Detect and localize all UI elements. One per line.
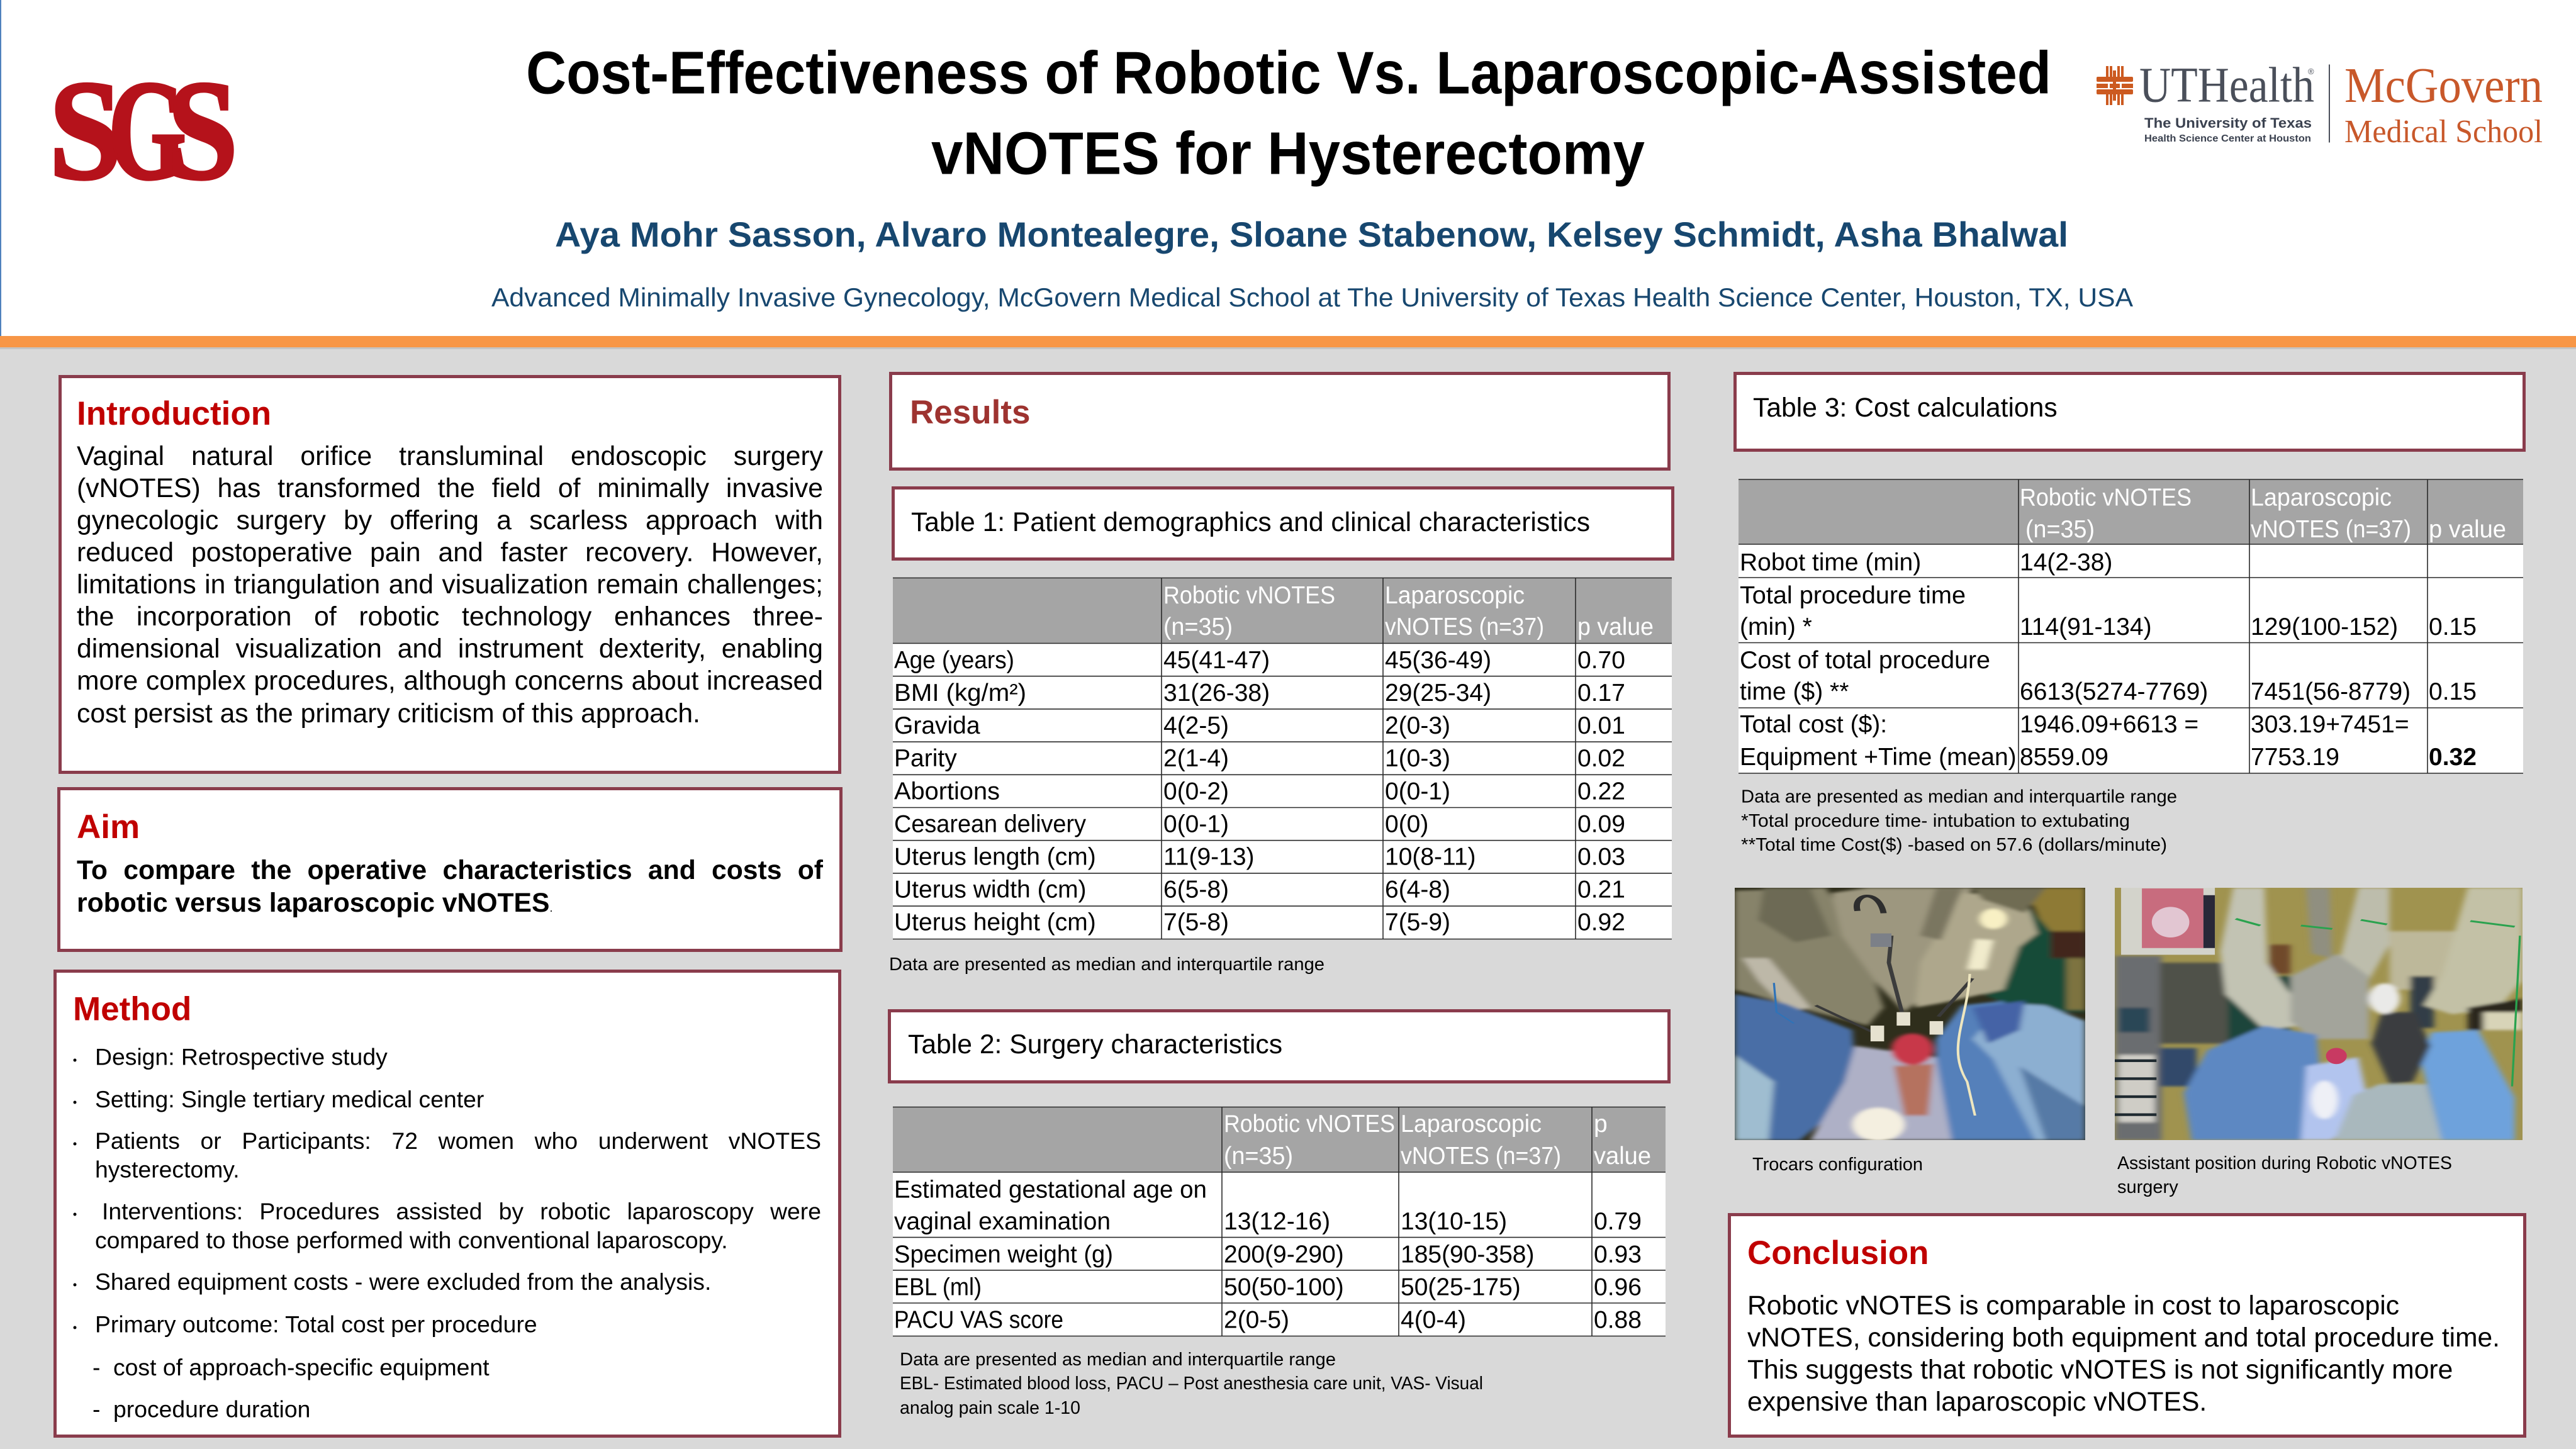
table 1: patient demographics: vNOTES (n=37) xyxy=(1385,613,1544,641)
list: method items: Design: Retrospective study xyxy=(95,1043,388,1070)
table 3: cost calculations: vNOTES (n=37) xyxy=(2251,516,2411,543)
logo: UTHealth McGovern Medical School: Health Science Center at Houston xyxy=(2144,133,2311,144)
table 3: cost calculations: 7753.19 xyxy=(2251,744,2339,771)
table 1: patient demographics: 0.01 xyxy=(1577,712,1625,739)
table 1: patient demographics: 0(0) xyxy=(1385,810,1428,838)
table 1: patient demographics: 7(5-8) xyxy=(1163,909,1229,936)
table 3: cost calculations: Total procedure time xyxy=(1740,582,1966,609)
table 2: surgery characteristics: Robotic vNOTES xyxy=(1224,1111,1395,1138)
list: method items: hysterectomy. xyxy=(95,1156,240,1183)
panel: table 3 title xyxy=(1735,374,2524,450)
table 3: cost calculations: Cost of total procedure xyxy=(1740,647,1990,674)
list: method items xyxy=(73,1043,821,1422)
panel: conclusion xyxy=(1729,1214,2524,1436)
table 2: surgery characteristics: (n=35) xyxy=(1224,1143,1293,1170)
table 3: cost calculations xyxy=(1739,479,2523,773)
table 1: patient demographics: 0(0-1) xyxy=(1385,778,1450,805)
table 1: patient demographics: 0.22 xyxy=(1577,778,1625,805)
text block: introduction body: reduced postoperative pain and faster recovery. However, xyxy=(77,537,823,568)
title: Cost-Effectiveness of Robotic Vs. Laparoscopic-Assisted xyxy=(526,39,2051,107)
text block: conclusion body: Robotic vNOTES is comparable in cost to laparoscopic xyxy=(1747,1290,2399,1321)
table 3: cost calculations: Laparoscopic xyxy=(2251,484,2392,512)
table 2: surgery characteristics: 185(90-358) xyxy=(1401,1241,1534,1268)
table 1: patient demographics: Uterus length (cm) xyxy=(894,843,1096,871)
text block: introduction body: more complex procedures, although concerns about increased xyxy=(77,666,823,696)
photo: assistant position during robotic surgery xyxy=(2115,888,2523,1140)
table 2: surgery characteristics: 50(25-175) xyxy=(1401,1274,1521,1301)
text block: aim body xyxy=(77,854,823,918)
logo: UTHealth McGovern Medical School: Medical School xyxy=(2344,114,2543,150)
table 2 notes xyxy=(900,1350,1483,1418)
panel: method xyxy=(55,971,839,1436)
table 1: patient demographics: 4(2-5) xyxy=(1163,712,1229,739)
table 2 notes: Data are presented as median and interquartile range xyxy=(900,1350,1336,1370)
table 3: cost calculations: 129(100-152) xyxy=(2251,613,2398,641)
table 1: patient demographics: 0(0-1) xyxy=(1163,810,1229,838)
table 3 notes: Data are presented as median and interquartile range xyxy=(1741,787,2177,807)
table 1: patient demographics: 0(0-2) xyxy=(1163,778,1229,805)
logo: SGS: G xyxy=(108,52,186,209)
table 1: patient demographics: 31(26-38) xyxy=(1163,680,1270,707)
table 2: surgery characteristics: value xyxy=(1594,1143,1651,1170)
table 1: patient demographics: 0.03 xyxy=(1577,843,1625,871)
table 2: surgery characteristics: Specimen weight (g) xyxy=(894,1241,1113,1268)
text block: introduction body: the incorporation of robotic technology enhances three- xyxy=(77,601,823,632)
table 1: patient demographics: 0.92 xyxy=(1577,909,1625,936)
table 3: cost calculations: 6613(5274-7769) xyxy=(2020,678,2208,705)
panel: table 2 title xyxy=(890,1010,1669,1082)
text block: introduction body: Vaginal natural orifice transluminal endoscopic surgery xyxy=(77,441,823,471)
panel: introduction xyxy=(60,376,839,773)
table 1: patient demographics: 0.09 xyxy=(1577,810,1625,838)
caption: trocars: Trocars configuration xyxy=(1752,1155,1923,1175)
table 2 notes: EBL- Estimated blood loss, PACU – Post anesthesia care unit, VAS- Visual xyxy=(900,1373,1483,1394)
text block: aim body: To compare the operative characteristics and costs of xyxy=(77,855,823,885)
panel: results heading: Results xyxy=(910,394,1030,431)
table 1: patient demographics: BMI (kg/m²) xyxy=(894,680,1026,707)
table 1: patient demographics: Laparoscopic xyxy=(1385,582,1525,609)
table 1: patient demographics: 45(36-49) xyxy=(1385,647,1491,674)
list: method items: procedure duration xyxy=(113,1396,310,1422)
heading: conclusion: Conclusion xyxy=(1747,1234,1929,1272)
table 1: patient demographics: Cesarean delivery xyxy=(894,810,1086,838)
table 3: cost calculations: time ($) ** xyxy=(1740,678,1849,705)
text block: conclusion body: expensive than laparoscopic vNOTES. xyxy=(1747,1387,2207,1417)
panel: aim xyxy=(59,789,841,950)
logo: UTHealth McGovern Medical School: McGovern xyxy=(2344,59,2543,113)
text block: conclusion body: vNOTES, considering both equipment and total procedure time. xyxy=(1747,1323,2500,1353)
table 2: surgery characteristics: 0.88 xyxy=(1594,1307,1642,1334)
text block: conclusion body xyxy=(1747,1290,2500,1417)
table 1: patient demographics: 0.70 xyxy=(1577,647,1625,674)
table 3: cost calculations: 303.19+7451= xyxy=(2251,711,2409,738)
table 1: patient demographics: Age (years) xyxy=(894,647,1014,674)
table 3: cost calculations: (min) * xyxy=(1740,613,1812,641)
text block: introduction body xyxy=(77,440,823,729)
logo: UTHealth McGovern Medical School: The University of Texas xyxy=(2144,115,2312,131)
table 3 notes: **Total time Cost($) -based on 57.6 (dollars/minute) xyxy=(1741,835,2167,855)
table 3: cost calculations: 7451(56-8779) xyxy=(2251,678,2411,705)
table 1: patient demographics: 0.17 xyxy=(1577,680,1625,707)
list: method items: compared to those performed with conventional laparoscopy. xyxy=(95,1227,728,1253)
logo: UTHealth McGovern Medical School xyxy=(2097,58,2543,150)
table 2: surgery characteristics: EBL (ml) xyxy=(894,1274,982,1301)
icon: UTHealth brick emblem xyxy=(2097,66,2133,105)
table 2: surgery characteristics: Laparoscopic xyxy=(1401,1111,1542,1138)
table 2: surgery characteristics: 0.93 xyxy=(1594,1241,1642,1268)
table 1: patient demographics: 7(5-9) xyxy=(1385,909,1450,936)
table 1: patient demographics: 6(4-8) xyxy=(1385,876,1450,904)
table 3: cost calculations: 8559.09 xyxy=(2020,744,2108,771)
table 3: cost calculations: 0.15 xyxy=(2429,678,2477,705)
table 1: patient demographics: 11(9-13) xyxy=(1163,843,1255,871)
caption: assistant position: surgery xyxy=(2117,1177,2178,1197)
panel: results heading xyxy=(891,374,1669,469)
heading: aim: Aim xyxy=(77,808,140,846)
text block: introduction body: gynecologic surgery by offering a scarless approach with xyxy=(77,505,823,535)
table 1 note: Data are presented as median and interquartile range xyxy=(889,954,1324,975)
heading: method: Method xyxy=(73,990,191,1028)
text block: introduction body: cost persist as the primary criticism of this approach. xyxy=(77,698,700,729)
table 2: surgery characteristics: 200(9-290) xyxy=(1224,1241,1344,1268)
table 3: cost calculations: Robotic vNOTES xyxy=(2020,484,2192,512)
logo: SGS xyxy=(49,52,238,209)
table 2: surgery characteristics: 50(50-100) xyxy=(1224,1274,1344,1301)
table 1: patient demographics: (n=35) xyxy=(1163,613,1233,641)
title xyxy=(526,39,2051,187)
text block: introduction body: limitations in triangulation and visualization remain challenges; xyxy=(77,569,823,600)
logo: UTHealth McGovern Medical School: ® xyxy=(2308,67,2314,76)
table 1: patient demographics: Parity xyxy=(894,745,957,772)
table 2: surgery characteristics: 13(12-16) xyxy=(1224,1208,1330,1235)
list: method items: cost of approach-specific equipment xyxy=(113,1354,490,1380)
table 2: surgery characteristics: 4(0-4) xyxy=(1401,1307,1466,1334)
table 2: surgery characteristics: p xyxy=(1594,1111,1608,1138)
text block: introduction body: dimensional visualization and instrument dexterity, enabling xyxy=(77,634,823,664)
table 1: patient demographics: Uterus height (cm) xyxy=(894,909,1096,936)
list: method items: - xyxy=(92,1354,100,1380)
authors: Aya Mohr Sasson, Alvaro Montealegre, Sloane Stabenow, Kelsey Schmidt, Asha Bhalwal xyxy=(555,215,2068,254)
table 3 notes: *Total procedure time- intubation to extubating xyxy=(1741,811,2130,831)
header band xyxy=(0,0,2576,336)
text block: aim body: robotic versus laparoscopic vNOTES. xyxy=(77,888,552,918)
table 1: patient demographics: Robotic vNOTES xyxy=(1163,582,1335,609)
photo: trocars configuration xyxy=(1735,888,2085,1140)
table 1: patient demographics: 2(1-4) xyxy=(1163,745,1229,772)
table 3: cost calculations: Total cost ($): xyxy=(1740,711,1887,738)
table 1: patient demographics: 2(0-3) xyxy=(1385,712,1450,739)
table 3: cost calculations: 0.32 xyxy=(2429,744,2477,771)
logo: SGS: S xyxy=(49,52,122,209)
text block: introduction body: (vNOTES) has transformed the field of minimally invasive xyxy=(77,473,823,503)
table 1: patient demographics: 10(8-11) xyxy=(1385,843,1476,871)
table 1: patient demographics: Abortions xyxy=(894,778,1000,805)
list: method items: - xyxy=(92,1396,100,1422)
table 1: patient demographics: 6(5-8) xyxy=(1163,876,1229,904)
panel: table 1 title xyxy=(893,488,1672,559)
table 2: surgery characteristics: 0.79 xyxy=(1594,1208,1642,1235)
list: method items: Shared equipment costs - were excluded from the analysis. xyxy=(95,1268,711,1295)
table 2: surgery characteristics: Estimated gestational age on xyxy=(894,1177,1207,1204)
table 2: surgery characteristics: vaginal examination xyxy=(894,1208,1111,1235)
table 3 notes xyxy=(1741,787,2177,855)
table 3: cost calculations: p value xyxy=(2429,516,2506,543)
heading: introduction: Introduction xyxy=(77,395,271,432)
table 1: patient demographics: 0.02 xyxy=(1577,745,1625,772)
list: method items: Interventions: Procedures assisted by robotic laparoscopy were xyxy=(102,1198,821,1224)
table 2: surgery characteristics: 0.96 xyxy=(1594,1274,1642,1301)
table 1: patient demographics: 29(25-34) xyxy=(1385,680,1491,707)
table 1: patient demographics: Gravida xyxy=(894,712,980,739)
title: vNOTES for Hysterectomy xyxy=(931,120,1645,187)
table 2 notes: analog pain scale 1-10 xyxy=(900,1398,1080,1418)
table 3: cost calculations: 14(2-38) xyxy=(2020,549,2112,576)
table 1: patient demographics: Uterus width (cm) xyxy=(894,876,1087,904)
panel: table 3 title: Table 3: Cost calculations xyxy=(1753,393,2058,423)
panel: table 2 title: Table 2: Surgery characteristics xyxy=(908,1029,1282,1060)
table 2: surgery characteristics: vNOTES (n=37) xyxy=(1401,1143,1561,1170)
affiliation: Advanced Minimally Invasive Gynecology, McGovern Medical School at The University of Texas Health Science Center, Houston, TX, USA xyxy=(491,283,2133,312)
table 3: cost calculations: 0.15 xyxy=(2429,613,2477,641)
table 3: cost calculations: 1946.09+6613 = xyxy=(2020,711,2198,738)
table 3: cost calculations: (n=35) xyxy=(2025,516,2095,543)
table 1: patient demographics xyxy=(893,578,1672,939)
table 1: patient demographics: 1(0-3) xyxy=(1385,745,1450,772)
table 1: patient demographics: 45(41-47) xyxy=(1163,647,1270,674)
table 3: cost calculations: 114(91-134) xyxy=(2020,613,2152,641)
table 2: surgery characteristics xyxy=(893,1107,1666,1336)
table 3: cost calculations: Robot time (min) xyxy=(1740,549,1921,576)
table 3: cost calculations: Equipment +Time (mean) xyxy=(1740,744,2017,771)
table 2: surgery characteristics: 2(0-5) xyxy=(1224,1307,1289,1334)
orange divider bar xyxy=(0,336,2576,349)
panel: table 1 title: Table 1: Patient demographics and clinical characteristics xyxy=(911,507,1590,537)
list: method items: Primary outcome: Total cost per procedure xyxy=(95,1311,537,1338)
caption: assistant position: Assistant position during Robotic vNOTES xyxy=(2117,1153,2452,1173)
table 1: patient demographics: p value xyxy=(1577,613,1654,641)
table 1: patient demographics: 0.21 xyxy=(1577,876,1625,904)
text block: conclusion body: This suggests that robotic vNOTES is not significantly more xyxy=(1747,1355,2453,1385)
list: method items: Patients or Participants: 72 women who underwent vNOTES xyxy=(95,1127,821,1154)
caption: assistant position xyxy=(2117,1153,2452,1197)
logo: UTHealth McGovern Medical School: UTHealth xyxy=(2139,58,2314,113)
logo: SGS: S xyxy=(167,52,238,209)
table 2: surgery characteristics: 13(10-15) xyxy=(1401,1208,1507,1235)
table 2: surgery characteristics: PACU VAS score xyxy=(894,1307,1063,1334)
list: method items: Setting: Single tertiary medical center xyxy=(95,1086,484,1112)
